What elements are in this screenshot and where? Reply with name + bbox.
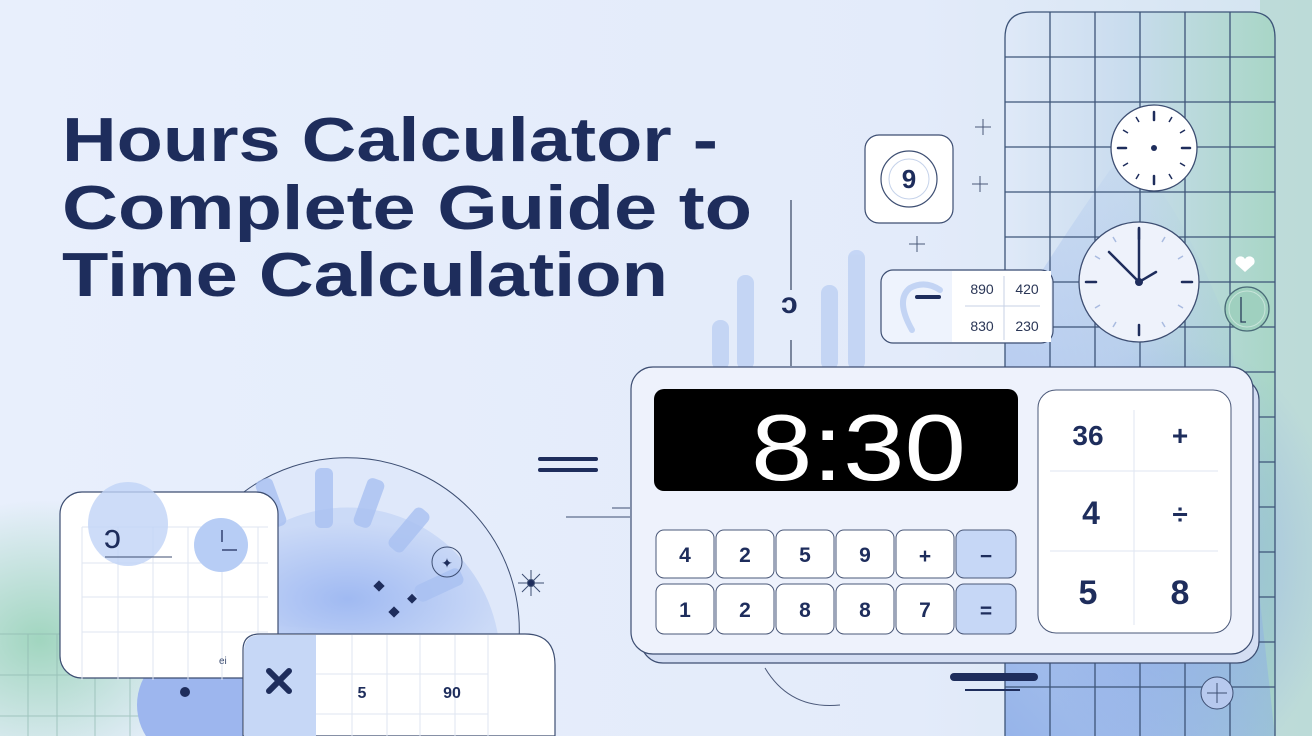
keypad: 8 — [859, 599, 871, 622]
side panel: 8 — [1171, 574, 1189, 612]
calculator — [631, 367, 1259, 663]
decorative stand — [765, 668, 1038, 706]
card: time values: 420 — [1015, 281, 1039, 297]
title: Complete Guide to — [62, 174, 752, 243]
icon: equals sign — [540, 459, 596, 470]
display: 8:30 — [751, 395, 966, 500]
keypad: 5 — [799, 544, 811, 567]
card: time values: 890 — [970, 281, 994, 297]
card: bottom multiply card: 90 — [443, 685, 461, 702]
keypad: 4 — [679, 544, 691, 567]
side panel: 4 — [1082, 495, 1100, 531]
side panel: 5 — [1079, 574, 1097, 612]
keypad: 9 — [859, 544, 871, 567]
panel: bottom-left dial illustration — [175, 458, 519, 660]
keypad: + — [919, 545, 931, 568]
bar chart decoration — [712, 250, 865, 370]
keypad: 7 — [919, 599, 931, 622]
icon: clock 2 — [1079, 222, 1199, 342]
card: 9 badge: 9 — [902, 164, 916, 194]
side panel: ÷ — [1172, 499, 1188, 530]
panel: bottom-left dial illustration: ✦ — [441, 555, 453, 571]
icon: clock 1 — [1111, 105, 1197, 191]
keypad: 2 — [739, 544, 751, 567]
icon: small compass — [1201, 677, 1233, 709]
card: bottom multiply card — [243, 634, 555, 736]
blue circle — [137, 647, 253, 736]
side panel: + — [1172, 420, 1188, 451]
icon: heart and small dial — [1225, 256, 1269, 331]
decorative line — [566, 508, 630, 517]
side panel — [1038, 390, 1231, 633]
keypad: = — [980, 600, 992, 623]
keypad: 2 — [739, 599, 751, 622]
title: Time Calculation — [62, 241, 668, 310]
title — [62, 106, 752, 310]
panel: background grid — [1005, 12, 1312, 736]
card: bottom multiply card: 5 — [358, 685, 367, 702]
card: bottom-left grid card: ei — [219, 656, 227, 667]
card: time values — [881, 270, 1053, 343]
side panel: 36 — [1072, 420, 1104, 451]
icon: sun burst — [518, 570, 544, 596]
icon: vertical line with c: ↄ — [781, 287, 798, 320]
card: time values: 830 — [970, 318, 994, 334]
card: bottom-left grid card: ɔ — [104, 518, 121, 556]
green grid patch — [0, 634, 150, 736]
title: Hours Calculator - — [62, 106, 718, 175]
card: time values: 230 — [1015, 318, 1039, 334]
keypad: 8 — [799, 599, 811, 622]
keypad — [656, 530, 1016, 634]
keypad: − — [980, 545, 992, 568]
display — [654, 389, 1018, 500]
card: bottom-left grid card — [60, 482, 278, 680]
keypad: 1 — [679, 599, 691, 622]
card: 9 badge — [865, 135, 953, 223]
icon: sparkles — [909, 119, 991, 252]
